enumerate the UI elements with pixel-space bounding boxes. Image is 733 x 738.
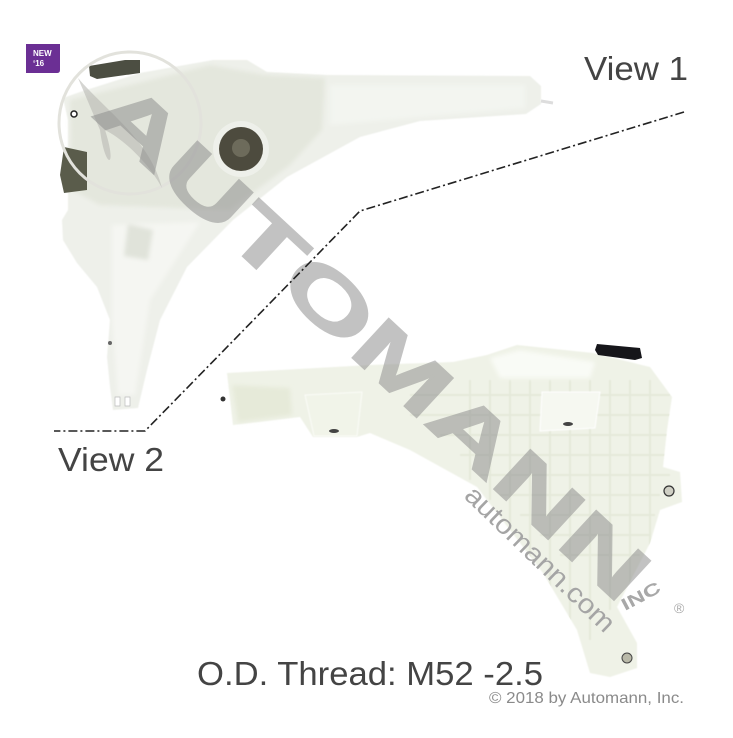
icon: end pin [220, 396, 226, 402]
icon: bolt 2 [563, 422, 573, 426]
label: view 1: View 1 [584, 50, 688, 87]
icon: lower slots [115, 397, 130, 406]
icon: pin [541, 101, 553, 103]
leader line [54, 112, 684, 431]
icon: black cap [595, 344, 642, 360]
badge: new 2016 [26, 44, 60, 73]
label: thread spec: O.D. Thread: M52 -2.5 [197, 655, 543, 692]
watermark AUTOMANN: AUTOMANN [78, 63, 668, 618]
tank view 2 [220, 344, 682, 677]
tank view 1 [60, 60, 553, 410]
badge: new 2016: ‘16 [33, 59, 45, 68]
copyright: © 2018 by Automann, Inc. [489, 690, 684, 707]
icon: bolt 3 [664, 486, 674, 496]
watermark logo circle [59, 52, 201, 194]
icon: cap side [60, 147, 87, 193]
icon: bolt 4 [622, 653, 632, 663]
watermark url: automann.com [459, 480, 621, 638]
icon: cap top [89, 60, 140, 79]
icon: mount hole [71, 111, 77, 117]
watermark registered mark: ® [674, 600, 685, 616]
badge: new 2016: NEW [33, 49, 52, 58]
icon: centre cap [213, 121, 269, 177]
icon: bolt 1 [329, 429, 339, 433]
watermark small inc label: INC [618, 578, 664, 615]
label: view 2: View 2 [58, 441, 164, 478]
